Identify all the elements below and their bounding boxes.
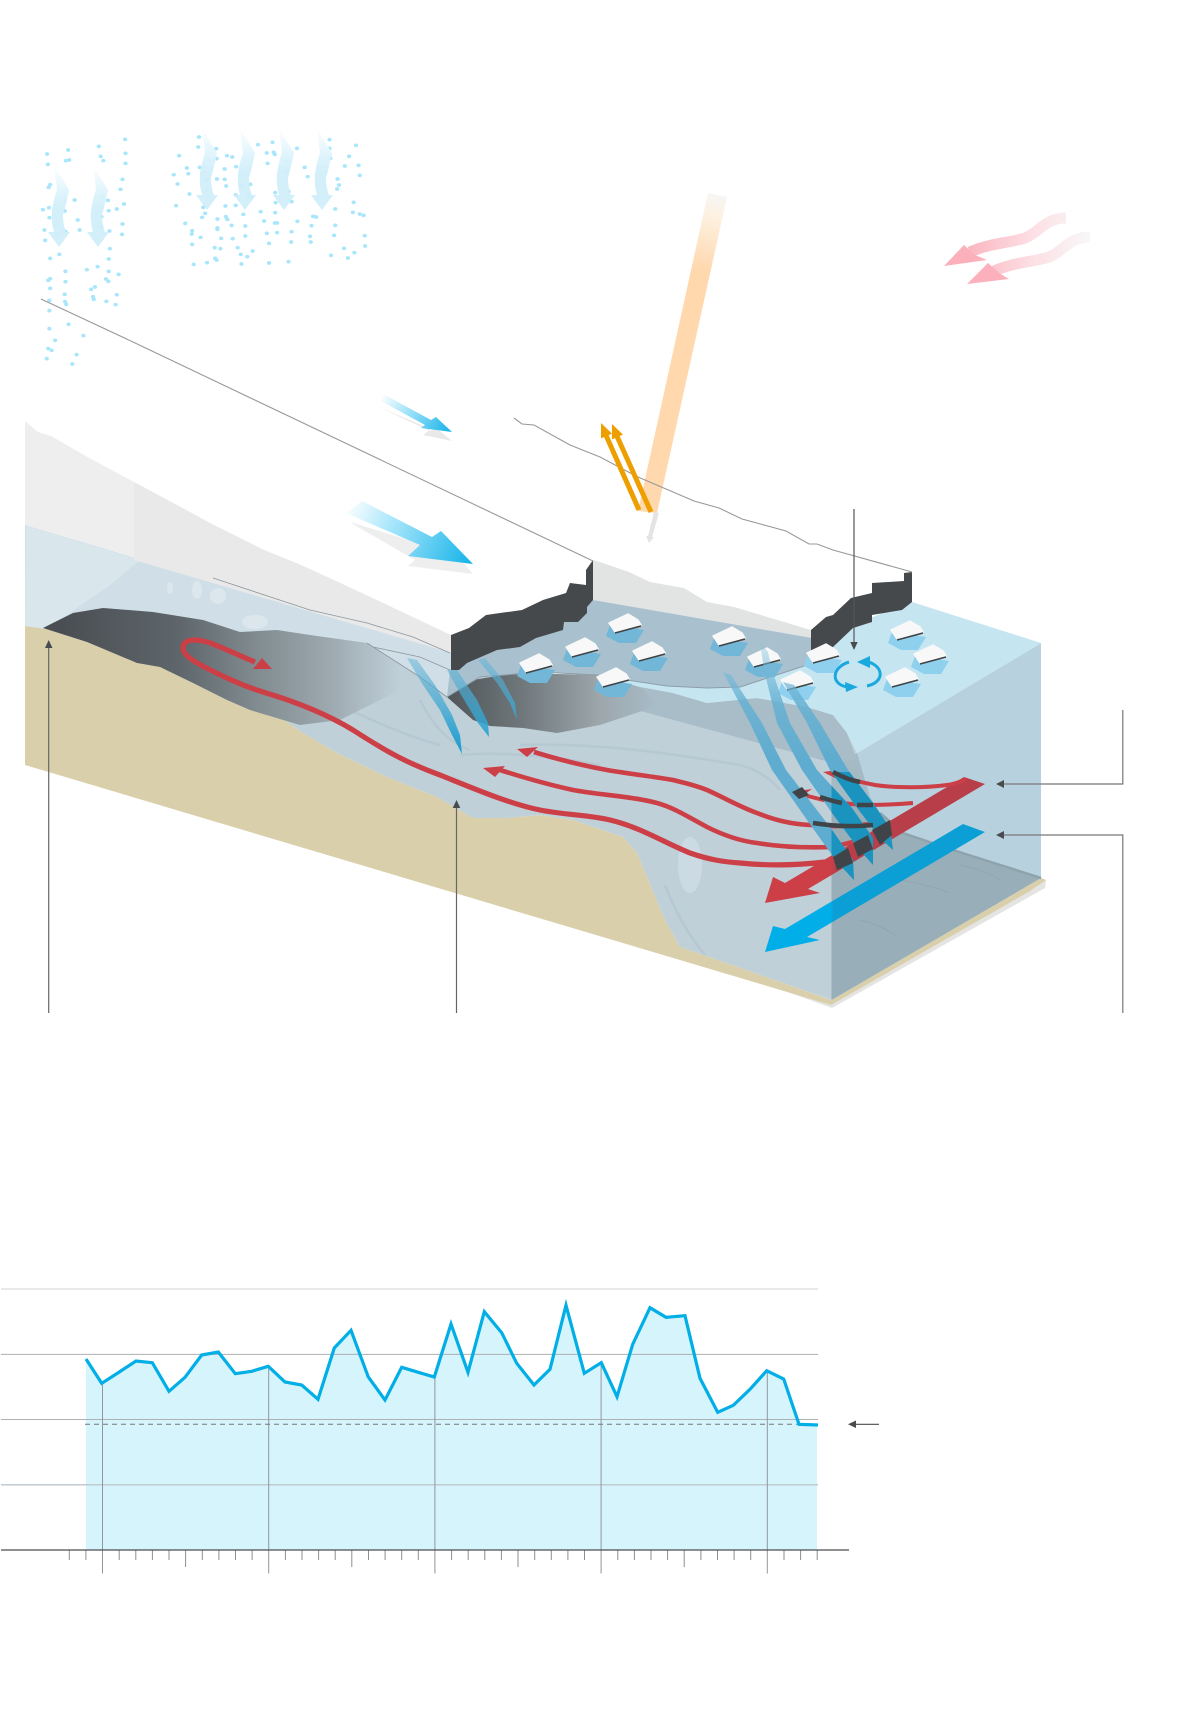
- under-shelf dark arch: [447, 673, 660, 733]
- infographic: glacier, ocean and ice-volume chart: [1, 135, 1124, 1574]
- overlap of warm and cold water: [792, 772, 892, 870]
- grounding zone lines: [213, 578, 450, 697]
- sea floor on front: [832, 800, 1041, 1000]
- dark shadow at grounding line: [43, 608, 400, 725]
- chart year lines: [102, 1363, 767, 1574]
- cold meltwater streams near glacier: [407, 658, 517, 754]
- ocean backdrop: [25, 525, 462, 705]
- chart axis ticks: [69, 1550, 817, 1567]
- leader arrow: warm water: [996, 710, 1123, 788]
- reflected light arrows: [601, 423, 651, 512]
- fjord surface between ice tongues: [447, 600, 812, 697]
- snow dots: [43, 137, 365, 364]
- leader arrow: cold water: [996, 831, 1123, 1013]
- chart area fill: [86, 1305, 817, 1550]
- warm deep water big arrow: [765, 777, 985, 903]
- cold streams through front face: [832, 772, 893, 880]
- ice front right: [811, 572, 912, 650]
- chart gridlines: [1, 1288, 818, 1290]
- sand: [25, 626, 1046, 1005]
- warm air arrows: [944, 218, 1090, 284]
- chart: ice volume over time: [1, 1289, 879, 1574]
- ice flank: [25, 421, 452, 653]
- leader arrow: grounding line: [45, 640, 52, 1013]
- cavity arch band: [447, 673, 857, 763]
- ice shelf top surface: [25, 299, 593, 635]
- leader arrow: seabed: [453, 800, 460, 1013]
- snowfall arrows: [48, 128, 333, 247]
- seabed sand block: [25, 626, 1046, 1008]
- surface lines: [41, 299, 912, 572]
- ice front left: [451, 560, 593, 670]
- seabed relief under the water: [43, 581, 857, 1000]
- transmitted light arrow: [646, 512, 659, 543]
- leader arrow: fjord circulation: [850, 509, 858, 650]
- ice flow arrow small: [379, 395, 452, 441]
- warm water streams: [183, 640, 966, 865]
- icebergs: [517, 614, 949, 700]
- chart baseline axis: [1, 1549, 849, 1551]
- chart data line: [86, 1305, 818, 1425]
- warm stream arrowheads: [253, 658, 845, 798]
- circulation arrows: [835, 656, 880, 692]
- sun beam: [638, 193, 727, 513]
- water surface: [597, 602, 1041, 753]
- ice flow arrow large: [346, 501, 473, 574]
- sand shadow edge: [740, 878, 1046, 1008]
- cold water big arrow: [765, 824, 985, 952]
- chart reference arrow: [848, 1420, 879, 1428]
- deep arch seen through front face: [832, 753, 880, 813]
- grey ice wall: [593, 560, 812, 638]
- front face of water block: [832, 643, 1041, 1000]
- cold streams descending at the front: [723, 642, 893, 880]
- fjord surface edge line: [447, 665, 807, 697]
- chart dashed reference line: [85, 1423, 800, 1425]
